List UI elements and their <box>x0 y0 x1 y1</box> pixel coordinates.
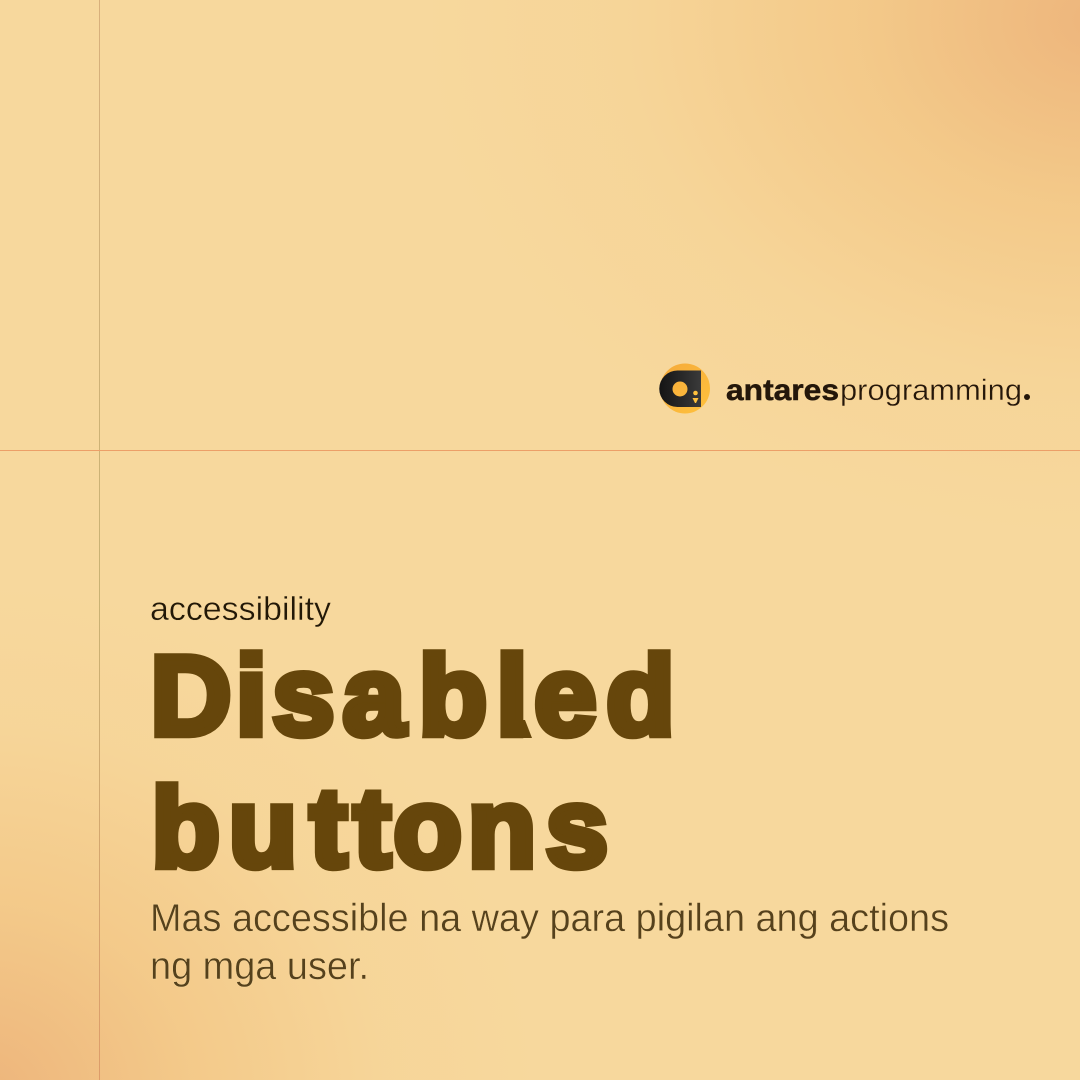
logo wordmark: programming <box>840 374 1022 407</box>
logo icon <box>659 364 710 414</box>
subtitle <box>150 897 949 988</box>
logo wordmark: antares <box>726 374 839 407</box>
subtitle: Mas accessible na way para pigilan ang actions <box>150 897 949 940</box>
title: buttons <box>152 766 608 890</box>
title: Disabled <box>150 634 675 758</box>
logo wordmark <box>726 374 1030 407</box>
title <box>150 634 675 890</box>
subtitle: ng mga user. <box>150 945 369 988</box>
category label: accessibility <box>150 590 332 627</box>
